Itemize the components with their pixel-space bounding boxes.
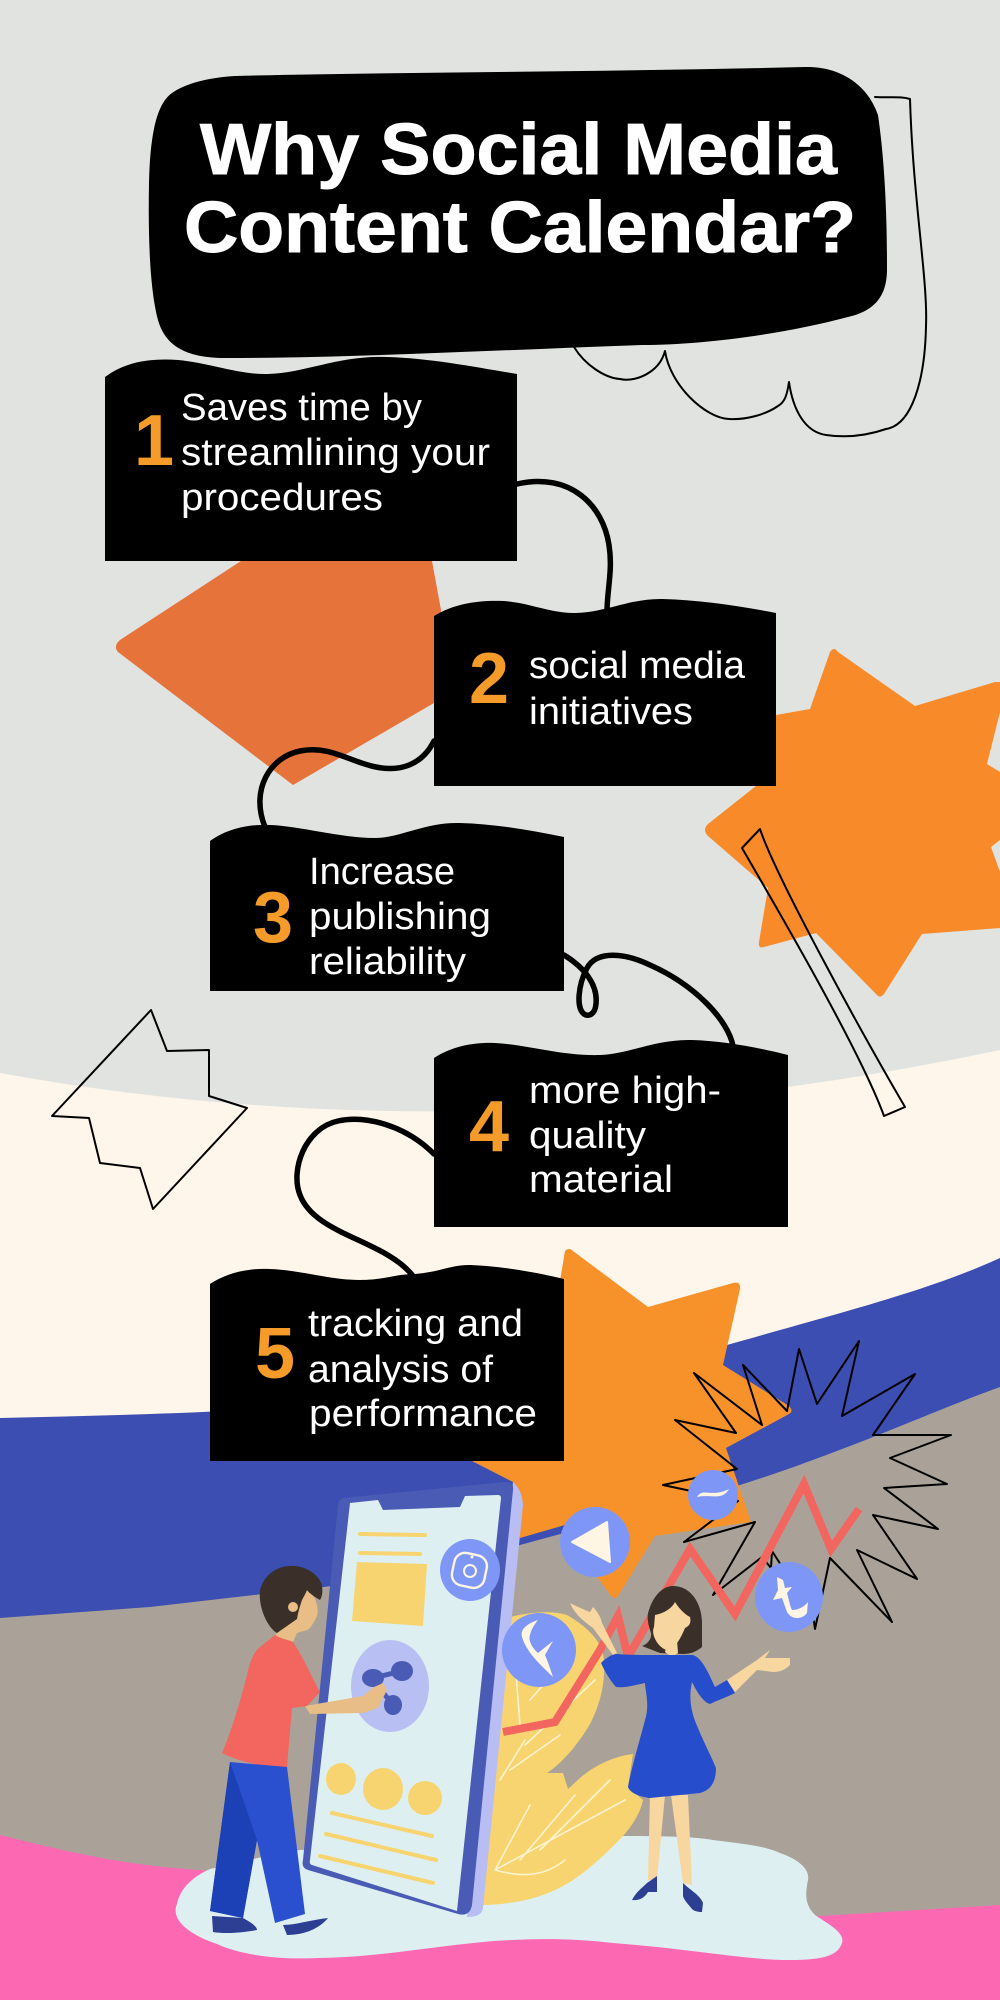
step 2 text: social media [529,645,746,687]
illustration ground blob [176,1836,842,1960]
step 3 text [309,851,491,983]
connector 4 to 5 [297,1119,434,1276]
man shirt [222,1635,320,1767]
background: pink floor [0,1835,1000,2000]
woman shoes [632,1876,703,1912]
screen yellow dots [326,1763,442,1815]
screen text lines [360,1534,425,1554]
step 4 panel [434,1040,788,1227]
background: cream arc [0,1050,1000,2000]
step 2 panel [434,599,776,786]
connector 2 to 3 [260,741,434,827]
decorative shape: orange star bottom [470,1249,792,1598]
connector 1 to 2 [517,482,610,612]
man ear [288,1602,298,1612]
step 4 text: more high- [529,1070,721,1112]
icon: instagram [440,1539,500,1601]
step 1 text [181,387,490,519]
title text: Why Social Media [200,110,838,190]
screen yellow card [352,1562,427,1626]
man arm [305,1683,387,1714]
screen lower lines [320,1813,436,1883]
step 4 text [529,1070,721,1201]
background: blue wave [0,1258,1000,1700]
step 1 number: 1 [134,401,174,481]
connector 3 to 4 [564,955,733,1046]
decorative shape: orange diamond [116,561,441,785]
icon: share [351,1640,429,1732]
step 3 text: reliability [309,941,466,983]
step 4 text: material [529,1159,673,1201]
step 3 text: Increase [309,851,455,893]
step 5 panel [210,1265,564,1461]
man neck and face [275,1590,318,1642]
step 1 text: Saves time by [181,387,422,429]
woman face [653,1602,690,1650]
background: taupe wave [0,1387,1000,2000]
icon: facebook bubble [502,1613,576,1687]
woman dress [601,1654,735,1798]
title banner [149,67,887,358]
man hair [260,1566,322,1633]
step 2 text: initiatives [529,691,693,733]
step 4 text: quality [529,1115,646,1157]
step 4 number: 4 [469,1087,509,1167]
decorative shape: large orange star right [705,649,1000,996]
outline: hollow star left [52,1010,247,1209]
phone screen [310,1495,501,1911]
phone [303,1482,523,1917]
step 5 text: performance [309,1393,537,1435]
step 5 number: 5 [255,1314,295,1394]
step 5 text: analysis of [308,1349,493,1391]
phone body [303,1482,513,1915]
outline: hollow bar [742,829,905,1116]
phone back edge [467,1482,523,1917]
woman left arm [570,1603,617,1655]
step 3 panel [210,823,564,991]
woman hair [642,1586,702,1654]
man trousers shade [210,1762,257,1918]
step 1 text: streamlining your [181,432,490,474]
woman neck [665,1640,678,1657]
step 3 text: publishing [309,896,491,938]
icon: tumblr bubble [755,1562,823,1632]
step 2 number: 2 [469,639,509,719]
woman figure [570,1586,790,1912]
step 2 text [529,645,746,733]
title text [184,110,856,268]
step 5 text [308,1303,537,1435]
woman legs [648,1795,692,1885]
step 1 text: procedures [181,477,383,519]
icon: messenger bubble [688,1470,738,1520]
man shoes [212,1916,328,1935]
man trousers [210,1762,305,1923]
step 5 text: tracking and [308,1303,523,1345]
outline: title scribble [574,97,926,436]
title text: Content Calendar? [184,188,856,268]
icon: play bubble [560,1507,630,1577]
chart: red trend line [503,1484,859,1732]
step 1 panel [105,357,517,561]
man figure [210,1566,387,1935]
woman right arm [727,1650,790,1692]
step 3 number: 3 [253,878,293,958]
outline: black spiky burst [663,1341,951,1629]
illustration yellow leaves [480,1612,643,1905]
